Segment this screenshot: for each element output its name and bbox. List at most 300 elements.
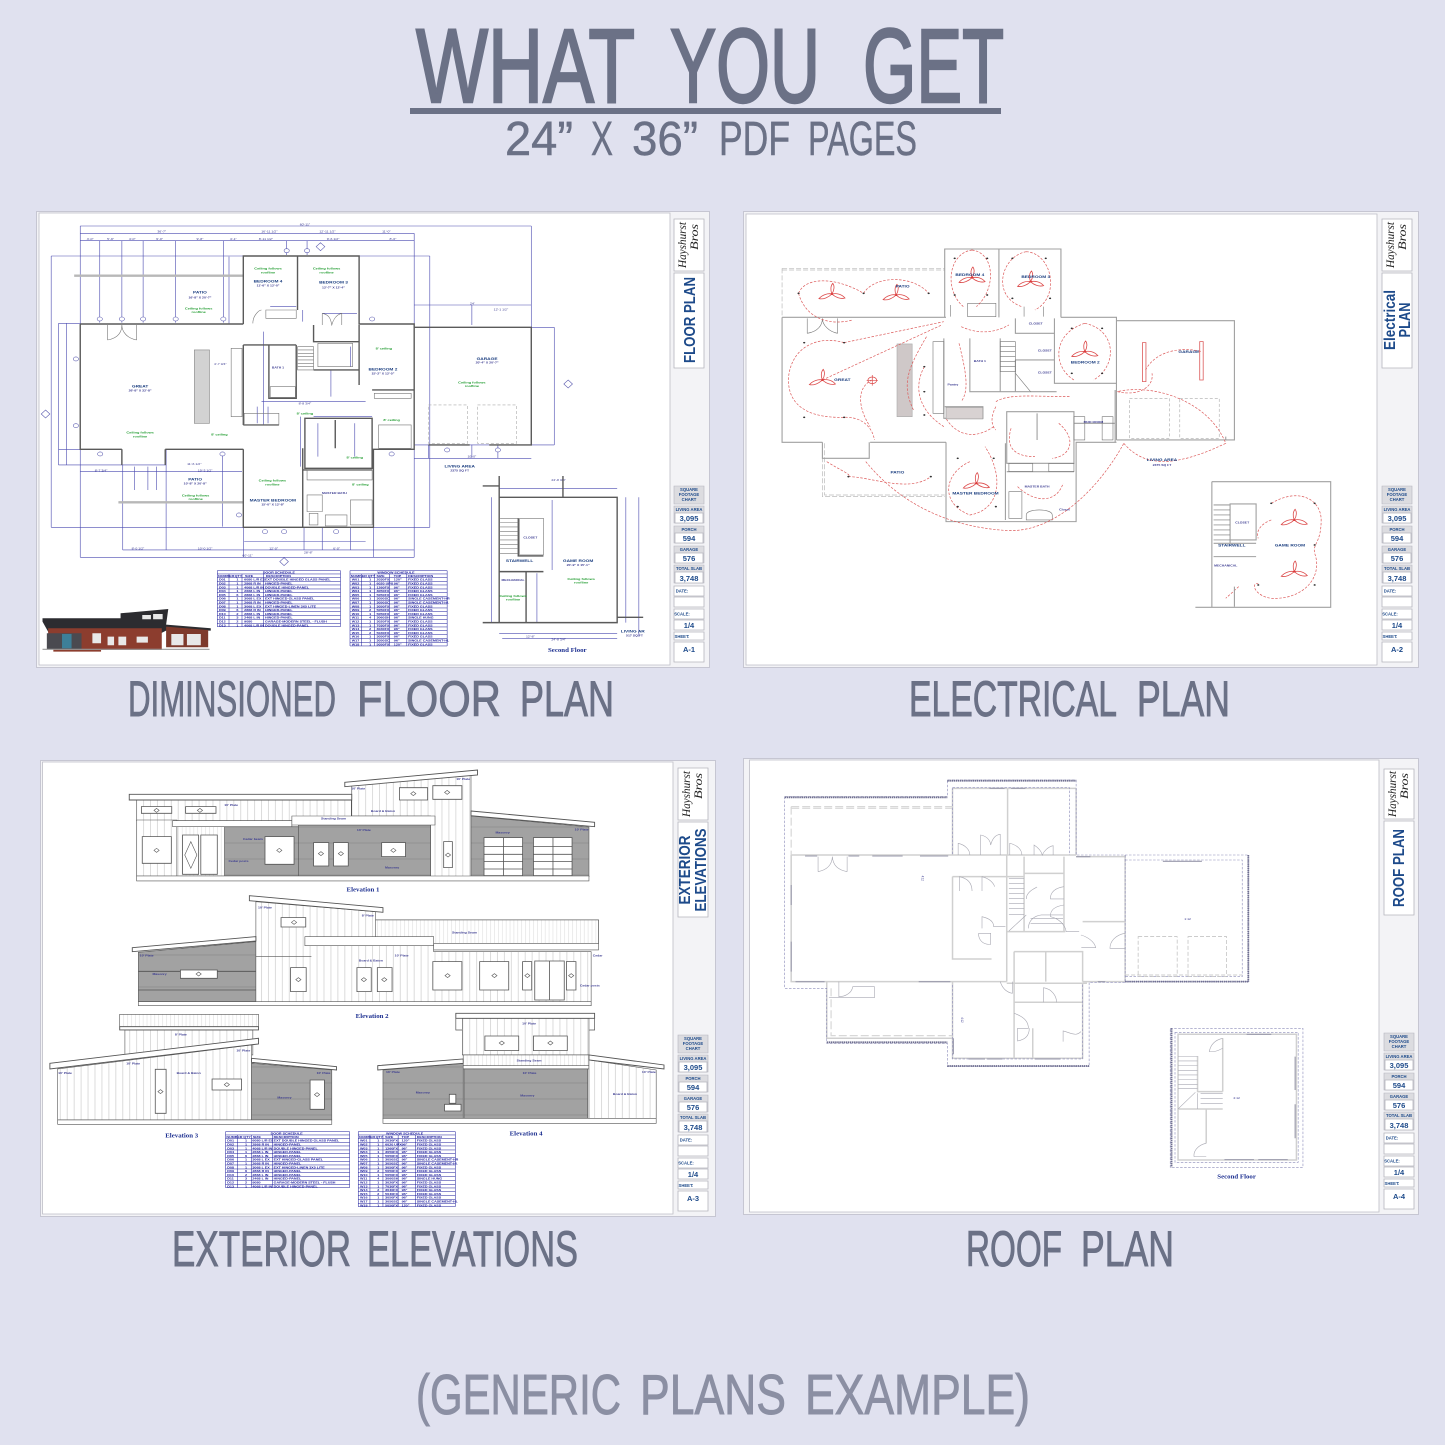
elevation 2: Masonry: [152, 972, 167, 976]
door schedule: EXT HINGED-LINEN 3X5 LITE: [265, 605, 317, 608]
window schedule: 1: [377, 1150, 380, 1154]
door schedule: 6: [245, 1169, 247, 1173]
room labels: LIVING AREA: [444, 464, 475, 469]
door schedule: HINGED-PANEL: [274, 1162, 301, 1165]
logo: Hayshurst: [679, 770, 693, 818]
window schedule: 1: [369, 624, 371, 627]
window schedule: 96": [394, 616, 400, 619]
room labels: 20'-4" X 20'-7": [476, 361, 499, 364]
square footage chart: 576: [1391, 554, 1403, 563]
dimension text: 6'-0": [333, 547, 340, 550]
window schedule: W15: [352, 631, 359, 635]
patio beams: [74, 276, 243, 502]
door schedule: 2868 R IN: [252, 1169, 270, 1173]
elevation 2: 10' Plate: [140, 954, 154, 958]
window schedule: W10: [360, 1173, 368, 1177]
subtitle: 24 X 36 PDF pages: X: [591, 113, 613, 166]
logo: Hayshurst: [675, 221, 689, 269]
window schedule: 2: [369, 608, 371, 612]
square footage chart: 3,095: [684, 1063, 702, 1072]
window schedule: 6020 UPX: [376, 582, 394, 585]
door schedule: 9080: [252, 1181, 261, 1184]
dimension text: 8'-11 1/2": [259, 237, 273, 241]
dimension lines: [51, 226, 639, 638]
window schedule: 96": [402, 1196, 408, 1199]
caption: exterior elevations: ELEVATIONS: [367, 1221, 578, 1277]
window schedule: 1260FX: [376, 586, 390, 589]
ceiling notes: roofline: [192, 310, 206, 314]
square footage chart: 3,095: [1388, 514, 1406, 523]
door schedule: 2868 L IN: [252, 1154, 269, 1158]
door schedule: 1: [245, 1185, 247, 1188]
window schedule: W17: [352, 639, 359, 642]
dimension text: 10'-0": [467, 455, 476, 459]
dimension text: 11'-0": [382, 230, 391, 234]
window schedule: 1: [369, 601, 371, 604]
door schedule: D13: [219, 624, 226, 627]
footnote: generic plans example: [416, 1363, 1030, 1427]
window schedule: DESCRIPTION: [417, 1135, 443, 1139]
window schedule: 3050SC: [385, 1158, 399, 1161]
door schedule: D04: [219, 589, 226, 593]
slope marks: [921, 876, 1240, 1100]
square footage chart: [1382, 486, 1412, 583]
door schedule: D05: [227, 1154, 234, 1158]
window schedule: W05: [352, 593, 359, 597]
window schedule: W06: [360, 1158, 368, 1161]
window schedule: 5050FX: [376, 593, 390, 597]
sheet title: PLAN: [1397, 302, 1414, 338]
window schedule: SINGLE HUNG: [408, 616, 434, 619]
window schedule: 2: [369, 627, 371, 631]
window schedule: FIXED GLASS: [408, 627, 433, 631]
date scale sheet: 1/4: [684, 621, 695, 630]
window schedule: W11: [360, 1177, 368, 1180]
window schedule: SINGLE CASEMENT-HR: [417, 1158, 459, 1161]
window schedule: 1: [377, 1143, 380, 1146]
window schedule: 96": [394, 608, 400, 612]
fixtures: [108, 310, 411, 526]
window schedule: 3020FX: [376, 620, 390, 623]
window schedule: SINGLE CASEMENT-HL: [417, 1162, 458, 1165]
room labels: 20'-9" X 15'-1": [567, 563, 590, 567]
window schedule: 6020 UPX: [385, 1143, 403, 1146]
elevation 1: 10' Plate: [575, 828, 589, 832]
door schedule: SIZE: [245, 574, 254, 578]
subtitle: 24 X 36 PDF pages: PDF: [719, 113, 790, 166]
elevation 1: Masonry: [496, 831, 510, 834]
slope marks: 1:12: [1184, 917, 1191, 921]
window schedule: W01: [360, 1139, 368, 1142]
door schedule: D12: [219, 620, 226, 623]
window schedule: QTY: [376, 1135, 384, 1139]
window schedule: 3050SC: [376, 639, 390, 642]
window schedule: FIXED GLASS: [417, 1147, 442, 1150]
window schedule: W13: [360, 1185, 368, 1188]
exterior drawing: [50, 770, 664, 1207]
logo: Bros: [1395, 224, 1409, 250]
window schedule: 96": [394, 601, 400, 604]
sheet title: [1382, 273, 1414, 368]
window schedule: 96": [402, 1166, 408, 1169]
window schedule: 1: [369, 605, 371, 608]
dimension text: 9'-0": [156, 237, 163, 241]
dimension text: 36'-7": [157, 230, 166, 234]
window schedule: 96": [402, 1169, 408, 1173]
door schedule: 6080 L/R EX: [252, 1139, 274, 1142]
door schedule: 2868 L IN: [244, 593, 261, 597]
ceiling notes: roofline: [265, 483, 280, 486]
elevation 2: 10' Plate: [395, 954, 409, 958]
room labels: LIVING AR: [621, 629, 645, 633]
date scale sheet: SHEET:: [679, 1183, 693, 1188]
door schedule: 1: [236, 597, 239, 600]
square footage chart: PORCH: [685, 1076, 701, 1081]
window schedule: 3050SC: [385, 1200, 399, 1203]
door schedule: NUMBER: [218, 574, 235, 578]
window schedule: FIXED GLASS: [408, 620, 433, 623]
door schedule: EXT DOUBLE HINGED GLASS PANEL: [274, 1139, 339, 1142]
circuit points: [797, 257, 1316, 586]
dimension text: 4'-0": [87, 237, 94, 241]
elevation 1: 10' Plate: [456, 777, 470, 781]
door schedule: D07: [227, 1162, 234, 1165]
sheet title: Electrical: [1382, 290, 1399, 350]
window schedule: W03: [360, 1147, 368, 1150]
door schedule: D04: [227, 1150, 234, 1154]
window schedule: 3060SH: [385, 1177, 399, 1180]
elevation 4: Masonry: [416, 1091, 430, 1094]
window schedule: 1: [377, 1158, 380, 1161]
room labels: 15'-2" X 12'-5": [371, 372, 395, 376]
dimension text: 9'-6 1/2": [327, 237, 339, 241]
door schedule: 4068 L/R IN: [252, 1185, 273, 1188]
dimension text: 11'-6 1/2": [187, 462, 201, 466]
elevation 4: 10' Plate: [523, 1071, 537, 1075]
window schedule: W14: [360, 1188, 368, 1192]
door schedule: D11: [219, 616, 226, 619]
door schedule: QTY: [235, 574, 243, 578]
door schedule: 2868 L IN: [244, 612, 261, 616]
logo: [674, 219, 704, 271]
door schedule: D03: [227, 1147, 234, 1150]
window schedule: FIXED GLASS: [408, 589, 433, 593]
square footage chart: PORCH: [1391, 1074, 1407, 1079]
window schedule: W07: [352, 601, 359, 604]
door schedule: D06: [227, 1158, 234, 1161]
window schedule: SINGLE HUNG: [417, 1177, 443, 1180]
room labels: PATIO: [188, 477, 203, 481]
room labels: GAME ROOM: [1275, 543, 1306, 547]
window schedule: 3040FX: [385, 1188, 399, 1192]
square footage chart: FOOTAGE: [683, 1041, 703, 1046]
ceiling notes: 8' ceiling: [211, 433, 228, 436]
room labels: MECHANICAL: [501, 578, 525, 582]
window schedule: 7030FX: [376, 624, 390, 627]
square footage chart: FOOTAGE: [1389, 1039, 1409, 1044]
door schedule: DOUBLE HINGED-PANEL: [274, 1185, 318, 1188]
window schedule: QTY: [368, 574, 376, 578]
door schedule: 2: [236, 612, 239, 616]
date scale sheet: SHEET:: [675, 634, 689, 639]
door schedule: 1: [245, 1139, 247, 1142]
window schedule: W04: [352, 589, 359, 593]
window schedule: 1: [377, 1154, 380, 1158]
ceiling notes: roofline: [133, 435, 147, 438]
dimension text: 4'-0": [129, 237, 136, 241]
door schedule: 1: [236, 582, 239, 585]
room labels: GREAT: [834, 378, 851, 382]
date scale sheet: SCALE:: [1382, 612, 1398, 616]
date scale sheet: SHEET:: [1385, 1181, 1399, 1186]
window schedule: FIXED GLASS: [408, 643, 433, 646]
dimension text: [87, 223, 566, 641]
room labels: Closet: [1059, 508, 1070, 511]
room labels: CLOSET: [1029, 322, 1043, 326]
caption: roof plan: PLAN: [1081, 1221, 1174, 1277]
window schedule: 96": [402, 1192, 408, 1196]
room labels: 12'-7" X 12'-4": [322, 286, 346, 289]
window schedule: W03: [352, 586, 359, 589]
elevation 2: 10' Plate: [258, 906, 272, 909]
title: WHAT YOU GET: YOU: [670, 8, 820, 125]
window schedule: FIXED GLASS: [417, 1196, 442, 1199]
ceiling notes: Ceiling follows: [499, 594, 527, 598]
door schedule: DOOR SCHEDULE: [263, 571, 296, 574]
ceiling notes: Ceiling follows: [567, 577, 595, 581]
door schedule: [226, 1132, 350, 1188]
room labels: MASTER BEDROOM: [250, 498, 296, 502]
upper patio outline: [791, 807, 953, 1036]
date scale sheet: A-3: [687, 1194, 699, 1203]
elevation 3: [50, 1014, 337, 1124]
window schedule: FIXED GLASS: [417, 1185, 442, 1188]
square footage chart: CHART: [1390, 497, 1405, 502]
room labels: MECHANICAL: [1214, 564, 1237, 567]
window schedule: 3050FX: [376, 635, 390, 638]
door schedule: DOUBLE HINGED-PANEL: [274, 1147, 318, 1150]
elevation 2: Standing Seam: [452, 931, 477, 935]
window schedule: 120": [402, 1139, 410, 1142]
slope marks: 4:12: [921, 876, 925, 881]
caption: dimensioned floor plan: DIMINSIONED: [128, 671, 336, 727]
elevation 4: 10' Plate: [522, 1022, 536, 1026]
window schedule: 96": [402, 1158, 408, 1161]
room labels: BEDROOM 3: [319, 280, 349, 284]
date scale sheet: 1/4: [1394, 1168, 1405, 1177]
ceiling notes: Ceiling follows: [126, 431, 154, 435]
square footage chart: LIVING AREA: [680, 1056, 706, 1061]
window schedule: W08: [360, 1166, 368, 1169]
square footage chart: 594: [683, 534, 696, 543]
title underline: [410, 108, 1001, 114]
elevation 4 label: Elevation 4: [510, 1129, 543, 1137]
subtitle: 24 X 36 PDF pages: 36”: [632, 113, 698, 166]
window schedule: FIXED GLASS: [408, 608, 433, 612]
sheet title: [1384, 821, 1414, 915]
window schedule: 3050SC: [385, 1162, 399, 1165]
dimension text: 5'-9": [107, 237, 114, 241]
door schedule: 2668 R IN: [252, 1162, 270, 1165]
window schedule: 120": [402, 1204, 410, 1207]
door schedule: 3: [236, 616, 239, 619]
elevation 2: [132, 896, 603, 1006]
door schedule: HINGED-PANEL: [265, 616, 293, 619]
window schedule: 96": [402, 1173, 408, 1177]
door schedule: 4068 L/R IN: [252, 1147, 273, 1150]
window schedule: 1: [369, 578, 371, 581]
caption: dimensioned floor plan: PLAN: [520, 671, 614, 727]
elevation 4: 10' Plate: [386, 1070, 400, 1074]
elevation 4: Standing Seam: [517, 1059, 542, 1062]
door schedule: HINGED-PANEL: [265, 582, 293, 585]
room labels: 15'-0" X 12'-8": [261, 503, 285, 506]
square footage chart: 594: [1393, 1081, 1406, 1090]
door schedule: D10: [219, 612, 226, 616]
window schedule: 120": [394, 643, 402, 646]
elevation 3: 8' Plate: [175, 1033, 187, 1037]
room labels: PATIO: [896, 284, 910, 289]
window schedule: 1: [369, 582, 371, 585]
door schedule: 2: [236, 620, 239, 623]
window schedule: W09: [352, 608, 359, 612]
window schedule: 1: [377, 1147, 380, 1150]
patio outlines: [782, 268, 945, 497]
window schedule: 5050FX: [385, 1204, 399, 1207]
ceiling notes: [126, 267, 595, 601]
dimension markers: [41, 243, 572, 566]
square footage chart: CHART: [682, 497, 697, 502]
door schedule: D05: [219, 593, 226, 597]
door schedule: D10: [227, 1173, 234, 1177]
ceiling notes: roofline: [261, 271, 275, 274]
square footage chart: 576: [687, 1103, 699, 1112]
door schedule: GARAGE-MODERN STEEL - FLUSH: [274, 1181, 336, 1184]
doors and stairs: [818, 834, 1223, 1157]
square footage chart: TOTAL SLAB: [680, 1115, 706, 1120]
door schedule: GARAGE-MODERN STEEL - FLUSH: [265, 620, 327, 623]
window schedule: W14: [352, 627, 359, 631]
window schedule: 96": [402, 1154, 408, 1158]
room labels: 2375 SQ FT: [1153, 463, 1172, 467]
elevation 3: 10' Plate: [317, 1071, 331, 1075]
panel: exterior elevations sheet: [40, 760, 716, 1216]
window schedule: W15: [360, 1192, 368, 1196]
footnote: generic plans example: PLANS: [640, 1363, 786, 1427]
window schedule: 1: [369, 593, 371, 597]
window schedule: 96": [402, 1188, 408, 1192]
door schedule: HINGED-PANEL: [265, 589, 293, 593]
window schedule: 96": [394, 631, 400, 635]
room labels: GREAT: [132, 384, 149, 389]
window schedule: 2030FX: [376, 578, 390, 581]
window schedule: 96": [394, 612, 400, 616]
door schedule: EXT HINGED-LINEN 3X5 LITE: [274, 1166, 326, 1169]
window schedule: W16: [360, 1196, 368, 1199]
door schedule: HINGED-PANEL: [265, 593, 293, 597]
window schedule: [350, 571, 450, 646]
window schedule: 1: [369, 635, 371, 638]
window schedule: 96": [394, 586, 400, 589]
square footage chart: SQUARE: [1388, 487, 1406, 492]
logo: Bros: [691, 773, 705, 799]
ceiling notes: Ceiling follows: [185, 307, 212, 310]
window schedule: FIXED GLASS: [417, 1188, 442, 1192]
date scale sheet: DATE:: [1386, 1136, 1398, 1140]
elevation 4: Board & Baton: [613, 1092, 637, 1096]
subtitle: 24 X 36 PDF pages: PAGES: [808, 113, 917, 166]
subtitle: 24 X 36 PDF pages: 24”: [505, 113, 573, 166]
window schedule: 3050SC: [376, 597, 390, 600]
window schedule: FIXED GLASS: [417, 1139, 442, 1142]
walls: [791, 788, 1296, 1160]
ceiling notes: roofline: [319, 271, 334, 274]
garage strip lights: [1142, 342, 1203, 382]
date scale sheet: DATE:: [1384, 588, 1396, 594]
window schedule: W17: [360, 1200, 368, 1203]
room labels: GARAGE: [1178, 350, 1200, 354]
ceiling notes: roofline: [574, 581, 588, 584]
window schedule: FIXED GLASS: [417, 1150, 442, 1154]
date scale sheet: SCALE:: [1384, 1158, 1400, 1164]
window schedule: 3060SH: [376, 616, 390, 619]
room labels: BEDROOM 3: [1021, 275, 1051, 279]
door schedule: HINGED-PANEL: [265, 612, 293, 616]
room labels: STAIRWELL: [1218, 543, 1246, 547]
room labels: [129, 279, 645, 654]
door schedule: EXT HINGED-GLASS PANEL: [265, 597, 314, 600]
square footage chart: CHART: [1392, 1044, 1407, 1049]
room labels: 2375 SQ FT: [450, 469, 469, 473]
caption: dimensioned floor plan: FLOOR: [357, 671, 501, 727]
walls: [80, 256, 531, 527]
window schedule: 3050FX: [385, 1150, 399, 1154]
second floor label: Second Floor: [1217, 1173, 1257, 1180]
room labels: 11'-6" X 12'-0": [257, 284, 280, 287]
window schedule: W01: [352, 578, 359, 581]
circuit runs: [788, 250, 1321, 598]
door schedule: QTY: [243, 1135, 252, 1139]
slope marks: 4:12: [1233, 1096, 1240, 1100]
room labels: 26'-8" X 32'-8": [129, 389, 152, 393]
dimension text: 19'-3 1/2": [198, 469, 212, 473]
door schedule: HINGED-PANEL: [265, 601, 293, 604]
dimension text: 12'-0": [269, 547, 278, 550]
window schedule: W11: [352, 616, 359, 619]
window schedule: [358, 1132, 459, 1207]
title: WHAT YOU GET: GET: [863, 8, 1004, 125]
door schedule: EXT HINGED-GLASS PANEL: [274, 1158, 323, 1161]
window schedule: W10: [352, 612, 359, 616]
door schedule: D12: [227, 1181, 234, 1184]
door schedule: 2868 R IN: [244, 608, 261, 612]
square footage chart: PORCH: [681, 527, 697, 532]
room labels: MASTER BATH: [1025, 485, 1050, 488]
window schedule: 1: [377, 1139, 380, 1142]
door schedule: 3: [245, 1177, 247, 1180]
window schedule: 1: [369, 612, 371, 616]
ceiling notes: Ceiling follows: [259, 479, 286, 483]
window schedule: SIZE: [385, 1135, 394, 1139]
window schedule: SINGLE CASEMENT-HL: [417, 1200, 458, 1203]
elevation 2 label: Elevation 2: [356, 1012, 389, 1020]
window schedule: W08: [352, 605, 359, 608]
door schedule: D06: [219, 597, 226, 600]
window schedule: FIXED GLASS: [417, 1154, 442, 1158]
panel: roof plan sheet: [744, 758, 1418, 1214]
window schedule: 2: [369, 631, 371, 635]
date scale sheet: [678, 1135, 708, 1211]
